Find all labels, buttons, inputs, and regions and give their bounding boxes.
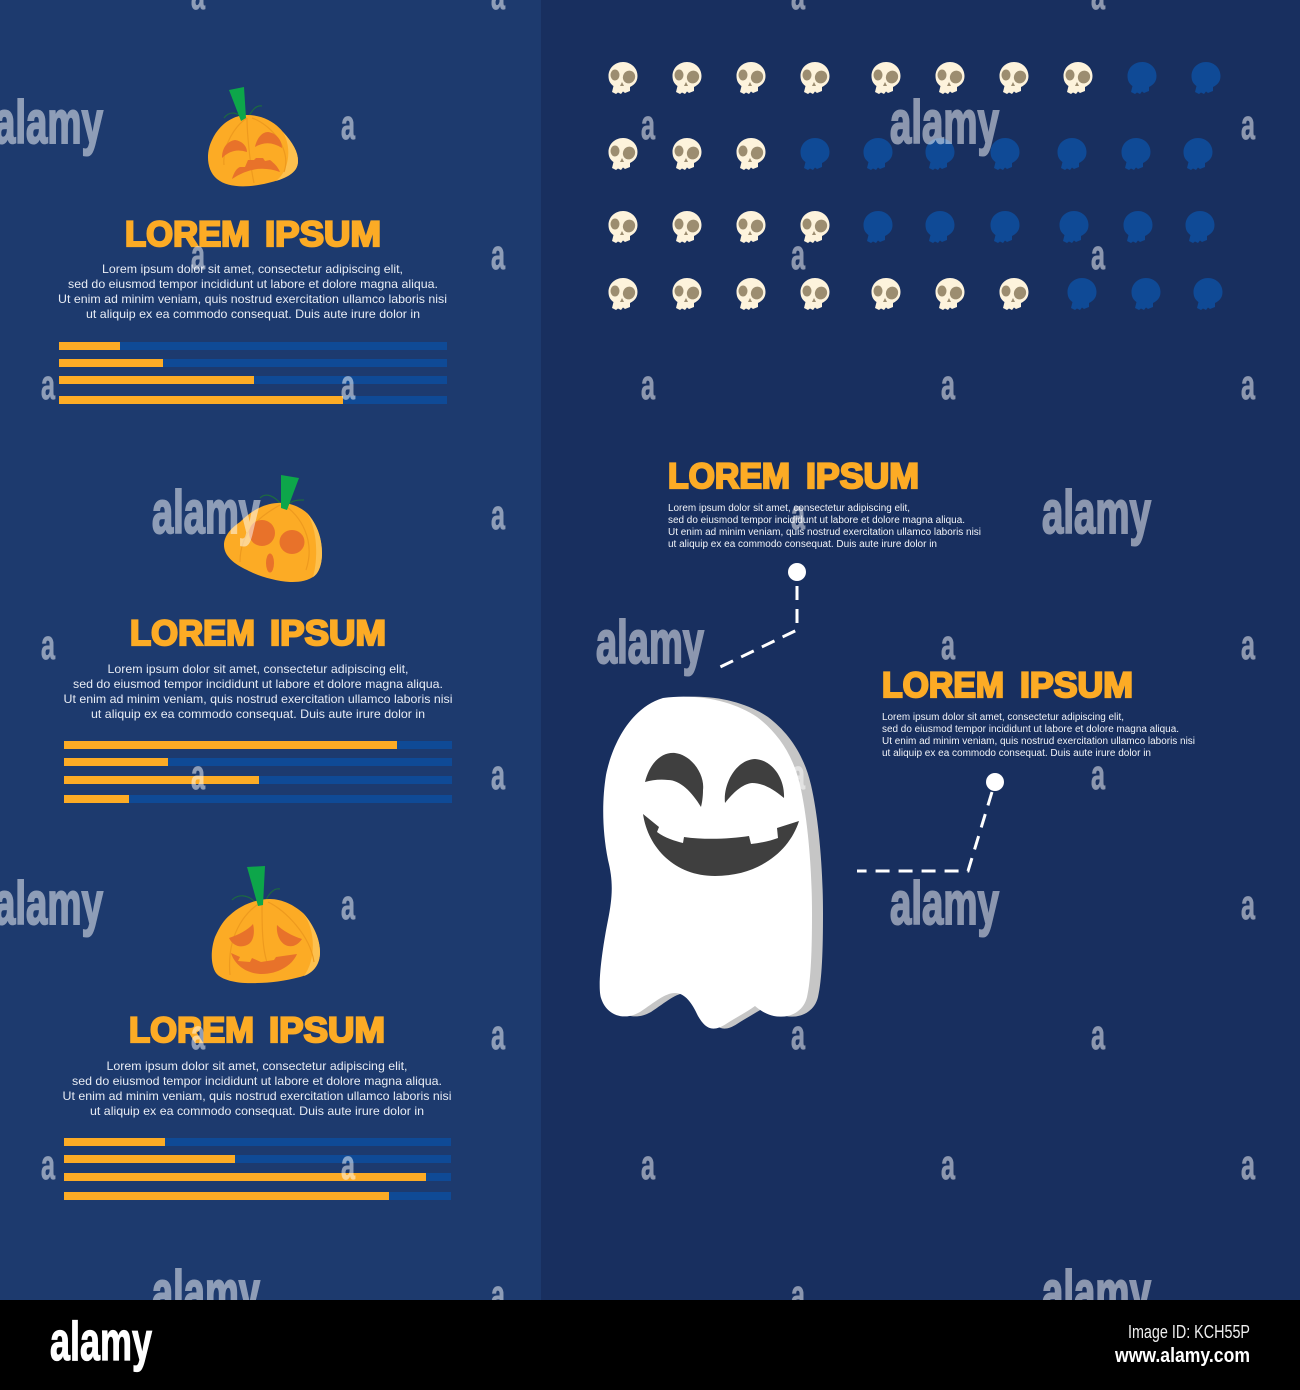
watermarks: a (641, 361, 655, 408)
image id: Image ID: KCH55P (1128, 1322, 1250, 1342)
text block: Lorem ipsum dolor sit amet, consectetur adipiscing elit, (108, 662, 408, 676)
background: right panel (541, 0, 1300, 1300)
watermarks: a (1091, 231, 1105, 278)
callout: right (882, 666, 1195, 759)
background: left panel (0, 0, 541, 1300)
text block: Ut enim ad minim veniam, quis nostrud exercitation ullamco laboris nisi (64, 692, 452, 706)
website: www.alamy.com (1114, 1345, 1250, 1367)
icon: smiling pumpkin (212, 866, 320, 983)
watermarks: alamy (890, 870, 999, 937)
text block: sed do eiusmod tempor incididunt ut labore et dolore magna aliqua. (668, 515, 965, 526)
heading: IPSUM (270, 614, 386, 653)
text block: ut aliquip ex ea commodo consequat. Duis aute irure dolor in (668, 539, 937, 550)
text block: Lorem ipsum dolor sit amet, consectetur adipiscing elit, (668, 503, 910, 514)
text block: Lorem ipsum dolor sit amet, consectetur adipiscing elit, (882, 712, 1124, 723)
heading (129, 1011, 385, 1050)
text block: Ut enim ad minim veniam, quis nostrud exercitation ullamco laboris nisi (668, 527, 981, 538)
watermarks: a (491, 231, 505, 278)
bar chart (64, 1138, 451, 1200)
text block: sed do eiusmod tempor incididunt ut labore et dolore magna aliqua. (68, 277, 438, 291)
watermarks: a (341, 361, 355, 408)
watermarks: alamy (1042, 479, 1151, 546)
bar chart (64, 741, 452, 803)
heading (130, 614, 386, 653)
heading (882, 666, 1133, 705)
heading: IPSUM (269, 1011, 385, 1050)
watermarks: a (641, 101, 655, 148)
footer logo: alamy (50, 1310, 152, 1372)
watermarks: a (1241, 881, 1255, 928)
skull pictogram grid (608, 62, 1222, 310)
heading: LOREM (668, 457, 790, 496)
text block (882, 712, 1195, 759)
watermarks: a (1241, 361, 1255, 408)
watermarks: a (1091, 751, 1105, 798)
callout: top (668, 457, 981, 550)
heading: IPSUM (1020, 666, 1133, 705)
watermarks: a (491, 491, 505, 538)
bar chart (59, 342, 447, 404)
text block: Lorem ipsum dolor sit amet, consectetur adipiscing elit, (106, 1059, 408, 1073)
ghost left eye (645, 753, 703, 807)
heading: LOREM (130, 614, 255, 653)
watermarks: alamy (890, 89, 999, 156)
watermarks: a (941, 361, 955, 408)
text block (64, 662, 452, 721)
ghost right eye (725, 759, 784, 803)
text block: Ut enim ad minim veniam, quis nostrud exercitation ullamco laboris nisi (62, 1089, 452, 1103)
watermarks: a (341, 1141, 355, 1188)
watermarks: alamy (152, 1259, 260, 1326)
text block: sed do eiusmod tempor incididunt ut labore et dolore magna aliqua. (72, 1074, 442, 1088)
text block: Ut enim ad minim veniam, quis nostrud exercitation ullamco laboris nisi (58, 292, 447, 306)
watermarks: a (341, 881, 355, 928)
heading: LOREM (125, 215, 250, 254)
watermarks: a (1241, 621, 1255, 668)
heading: LOREM (129, 1011, 254, 1050)
text block: ut aliquip ex ea commodo consequat. Duis aute irure dolor in (90, 1104, 424, 1118)
text block: Ut enim ad minim veniam, quis nostrud exercitation ullamco laboris nisi (882, 736, 1195, 747)
panel: pumpkin section 1 (58, 87, 447, 404)
connector: top callout to ghost (714, 563, 806, 670)
watermarks: a (791, 751, 805, 798)
watermarks: a (341, 101, 355, 148)
text block: Lorem ipsum dolor sit amet, consectetur adipiscing elit, (102, 262, 403, 276)
watermarks: a (491, 1011, 505, 1058)
watermarks: a (641, 1141, 655, 1188)
panel: pumpkin section 2 (64, 475, 452, 803)
watermarks: a (191, 1011, 205, 1058)
watermarks: a (791, 1271, 805, 1318)
watermarks: a (41, 621, 55, 668)
heading: LOREM (882, 666, 1004, 705)
text block (58, 262, 447, 321)
heading (668, 457, 919, 496)
watermarks: a (791, 1011, 805, 1058)
watermarks: a (1091, 1011, 1105, 1058)
watermarks: a (791, 231, 805, 278)
heading: IPSUM (806, 457, 919, 496)
watermarks: alamy (1042, 1259, 1151, 1326)
ghost mouth (643, 814, 799, 876)
text block (668, 503, 981, 550)
watermarks: a (491, 751, 505, 798)
watermarks: alamy (152, 479, 260, 546)
watermarks: a (41, 1141, 55, 1188)
icon: skull-faced pumpkin (224, 475, 322, 582)
watermarks: a (191, 751, 205, 798)
text block: sed do eiusmod tempor incididunt ut labore et dolore magna aliqua. (882, 724, 1179, 735)
watermarks: a (491, 1271, 505, 1318)
connector: right callout to ghost (857, 773, 1004, 871)
watermarks: a (191, 231, 205, 278)
icon: ghost (600, 697, 823, 1029)
watermarks: alamy (596, 609, 704, 676)
text block: ut aliquip ex ea commodo consequat. Duis aute irure dolor in (882, 748, 1151, 759)
watermarks: a (1241, 1141, 1255, 1188)
panel: pumpkin section 3 (62, 866, 452, 1200)
watermarks: a (1241, 101, 1255, 148)
watermarks: a (941, 621, 955, 668)
text block: ut aliquip ex ea commodo consequat. Duis aute irure dolor in (86, 307, 420, 321)
text block: ut aliquip ex ea commodo consequat. Duis aute irure dolor in (91, 707, 425, 721)
text block (62, 1059, 452, 1118)
heading: IPSUM (265, 215, 381, 254)
watermarks: a (791, 491, 805, 538)
text block: sed do eiusmod tempor incididunt ut labore et dolore magna aliqua. (73, 677, 443, 691)
icon: sad pumpkin (208, 87, 298, 186)
watermarks: a (41, 361, 55, 408)
footer band (0, 1300, 1300, 1390)
watermarks: a (941, 1141, 955, 1188)
heading (125, 215, 381, 254)
